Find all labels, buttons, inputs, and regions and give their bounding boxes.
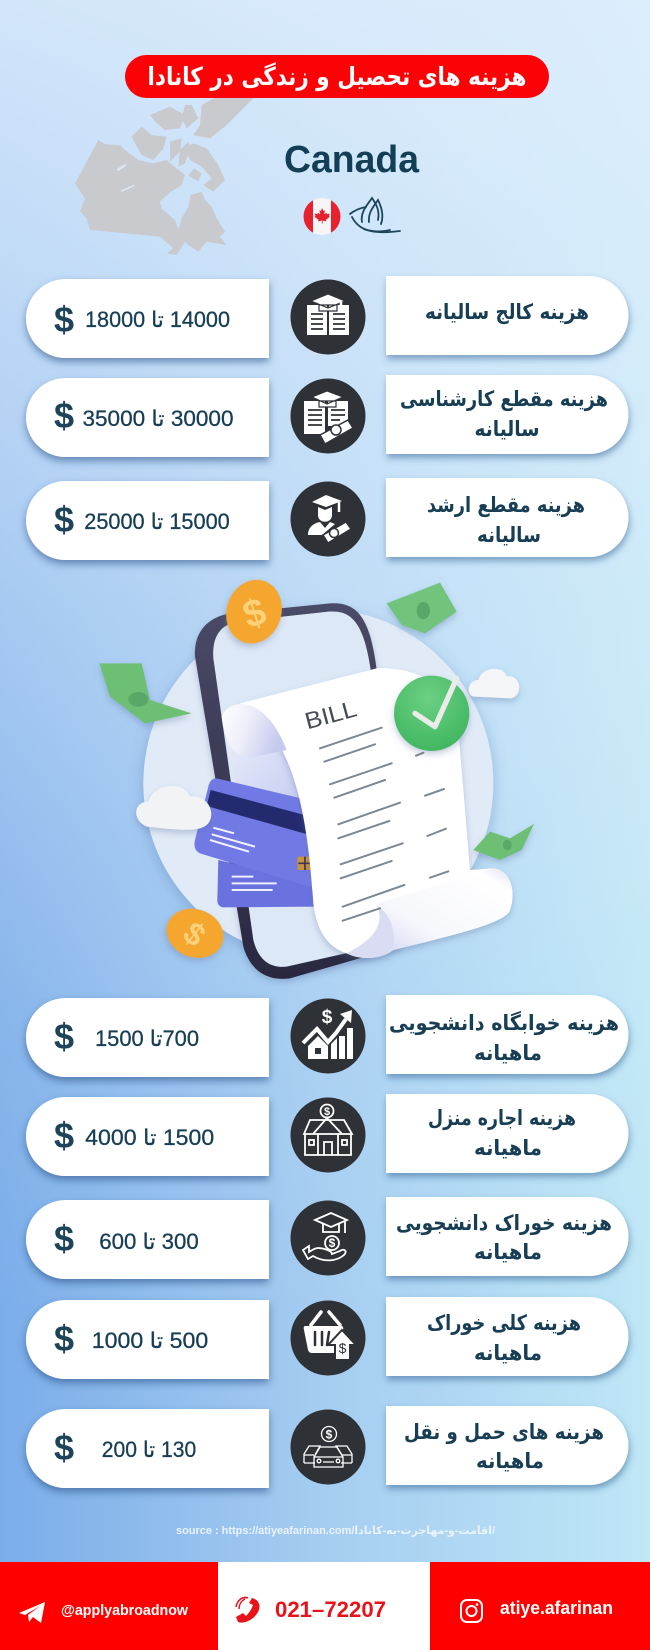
- cloud left: [136, 786, 211, 830]
- icon: house with coin: [290, 1098, 366, 1172]
- icon: Canadian flag: [303, 198, 341, 236]
- check badge: [394, 676, 469, 751]
- label pill: [386, 995, 628, 1074]
- value pill: 130 تا 200: [102, 1437, 196, 1462]
- heading: Canada: Canada: [284, 139, 420, 181]
- telegram panel: [0, 1562, 218, 1650]
- value pill: [26, 1409, 269, 1488]
- phone panel: 021–72207: [275, 1597, 386, 1622]
- value pill: $: [54, 395, 74, 436]
- label pill: هزینه مقطع کارشناسی: [400, 387, 608, 411]
- banknote right: [473, 824, 534, 860]
- icon: coin and cars: [290, 1410, 366, 1484]
- banknote top right: [387, 583, 457, 633]
- value pill: 14000 تا 18000: [85, 307, 230, 332]
- value pill: $: [54, 1318, 74, 1359]
- icon: book with cap: [290, 280, 366, 354]
- label pill: هزینه کلی خوراک: [427, 1311, 581, 1335]
- value pill: [26, 1097, 269, 1176]
- label pill: ماهیانه: [474, 1041, 542, 1065]
- label pill: هزینه مقطع ارشد: [427, 493, 585, 517]
- phone: [195, 603, 400, 979]
- bill sheet: [240, 668, 513, 958]
- row: bachelor cost: [26, 375, 629, 457]
- label pill: هزینه کالج سالیانه: [425, 300, 589, 324]
- row: college cost: [26, 276, 629, 358]
- top coin: [218, 572, 290, 651]
- value pill: $: [54, 299, 74, 340]
- bottom coin: [160, 901, 230, 966]
- footer bar: [0, 1562, 650, 1650]
- value pill: $: [54, 1016, 74, 1057]
- icon: coin and cars: $: [326, 1428, 333, 1442]
- value pill: [26, 279, 269, 358]
- value pill: 300 تا 600: [99, 1229, 199, 1254]
- icon: basket with price arrow: $: [339, 1340, 347, 1356]
- label pill: [386, 1197, 628, 1276]
- value pill: 500 تا 1000: [92, 1328, 208, 1353]
- illustration: bill, phone, cards, coins: [99, 572, 534, 979]
- backdrop circle: [143, 608, 493, 958]
- rear credit card: [217, 860, 315, 907]
- icon: graduate with diploma: [290, 482, 366, 556]
- value pill: [26, 481, 269, 560]
- label pill: ماهیانه: [474, 1341, 542, 1365]
- title pill: هزینه های تحصیل و زندگی در کانادا: [148, 62, 526, 92]
- value pill: [26, 1200, 269, 1279]
- label pill: هزینه های حمل و نقل: [404, 1420, 604, 1444]
- label pill: ماهیانه: [474, 1240, 542, 1264]
- instagram panel: atiye.afarinan: [500, 1598, 613, 1618]
- value pill: $: [54, 499, 74, 540]
- source line: source : https://atiyeafarinan.com/اقامت-و-مهاجرت-به-کانادا/: [176, 1525, 495, 1537]
- label pill: ماهیانه: [476, 1449, 544, 1473]
- top coin: $: [238, 590, 271, 637]
- label pill: هزینه خوراک دانشجویی: [396, 1211, 612, 1235]
- value pill: $: [54, 1427, 74, 1468]
- value pill: $: [54, 1218, 74, 1259]
- label pill: سالیانه: [477, 523, 541, 547]
- label pill: [386, 1406, 628, 1485]
- value pill: [26, 998, 269, 1077]
- icon: house and rising chart: [290, 998, 366, 1074]
- icon: house and rising chart: $: [322, 1007, 333, 1028]
- icon: book with cap and diploma: [290, 378, 366, 454]
- label pill: [386, 1094, 628, 1173]
- front credit card: [194, 778, 315, 888]
- icon: house with coin: $: [324, 1106, 330, 1118]
- label pill: هزینه خوابگاه دانشجویی: [389, 1010, 619, 1035]
- phone panel: [218, 1562, 430, 1650]
- row: house rent cost: [26, 1094, 629, 1176]
- instagram panel: [430, 1562, 650, 1650]
- label pill: [386, 276, 628, 355]
- icon: cap, coin and hand: $: [329, 1236, 336, 1250]
- row: transport cost: [26, 1406, 629, 1488]
- top curl of bill: [222, 704, 287, 758]
- label pill: ماهیانه: [474, 1136, 542, 1160]
- label pill: [386, 478, 628, 557]
- bottom coin: $: [177, 914, 213, 954]
- label pill: [386, 1297, 628, 1376]
- banknote left: [99, 663, 192, 723]
- value pill: 1500 تا 4000: [85, 1125, 214, 1150]
- row: dormitory cost: [26, 995, 629, 1077]
- icon: basket with price arrow: [290, 1300, 366, 1376]
- row: student food cost: [26, 1197, 629, 1279]
- label pill: هزینه اجاره منزل: [428, 1106, 576, 1130]
- row: general food cost: [26, 1297, 629, 1379]
- map of Canada: [75, 92, 253, 255]
- value pill: 700تا 1500: [95, 1026, 199, 1051]
- value pill: 30000 تا 35000: [83, 406, 234, 431]
- bill lines: [320, 728, 448, 921]
- telegram panel: @applyabroadnow: [61, 1602, 188, 1619]
- value pill: 15000 تا 25000: [84, 509, 230, 534]
- row: master cost: [26, 478, 629, 560]
- title pill: [125, 55, 549, 98]
- value pill: [26, 378, 269, 457]
- lavender sheet behind bill: [227, 740, 320, 837]
- BILL label: BILL: [302, 695, 360, 734]
- label pill: [386, 375, 628, 454]
- label pill: سالیانه: [474, 417, 540, 441]
- cloud right: [469, 669, 519, 698]
- icon: logo hand and bird: [350, 198, 400, 232]
- value pill: $: [54, 1115, 74, 1156]
- value pill: [26, 1300, 269, 1379]
- bottom roll of bill: [377, 868, 513, 950]
- icon: cap, coin and hand: [290, 1200, 366, 1276]
